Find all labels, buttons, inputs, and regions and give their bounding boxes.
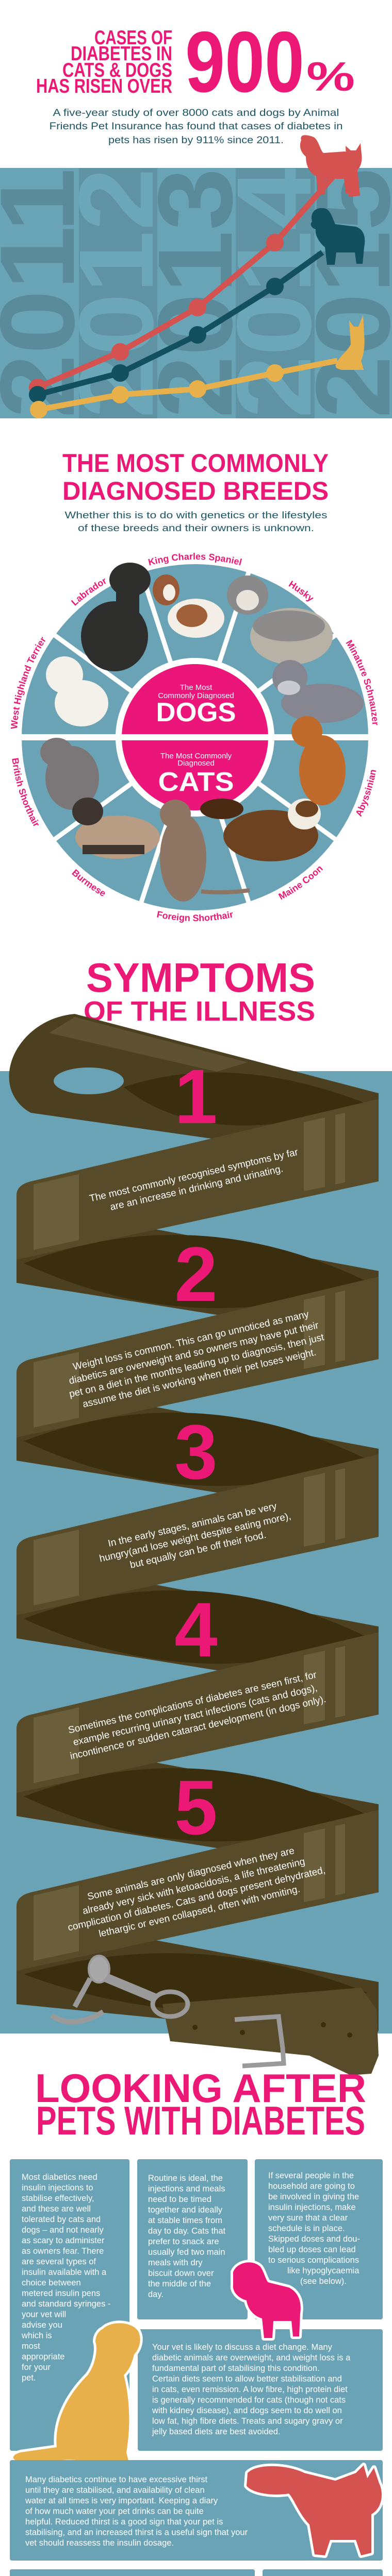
chart: growth of diabetes cases 2011-2016: 2014 [215, 168, 333, 418]
front band 4: symptom text: incontinence or sudden cataract development (in dogs only). [69, 1694, 327, 1762]
front band 3: symptom text: In the early stages, animals can be very [107, 1501, 278, 1549]
card: schedule: Skipped doses and dou- [268, 2234, 360, 2244]
breed labels: Husky [288, 581, 314, 602]
big number 900%: % [306, 54, 355, 99]
panel: symptoms leash [0, 1014, 392, 2075]
card: schedule: schedule is in place. [268, 2224, 345, 2233]
front band 3: symptom text: hungry(and lose weight despite eating more), [99, 1511, 292, 1564]
animal: maine coon [200, 799, 321, 861]
dogs centre label [156, 683, 236, 727]
breeds subtitle: of these breeds and their owners is unknown. [78, 523, 314, 533]
animal: foreign shorthair [160, 800, 250, 902]
line: all pets (red) [29, 177, 333, 396]
card: routine: Routine is ideal, the [148, 2174, 223, 2183]
card: routine: injections and meals [148, 2184, 225, 2194]
collar strap with buckle [162, 1988, 379, 2075]
card: routine: need to be timed [148, 2195, 211, 2204]
intro text: pets has risen by 911% since 2011. [108, 135, 284, 146]
card: insulin injections: Most diabetics need [22, 2173, 97, 2182]
back band with number 3 [17, 1388, 379, 1515]
breed labels: Minature Schnauzer [346, 640, 378, 725]
card: diet: Your vet is likely to discuss a diet change. Many [152, 2343, 333, 2352]
front band 4: symptom text: Sometimes the complications of diabetes are seen first, for [67, 1669, 318, 1736]
animal: british shorthair [40, 738, 99, 810]
front band 3: symptom text [17, 1454, 379, 1615]
heading: the most commonly diagnosed breeds: DIAGNOSED BREEDS [62, 477, 329, 505]
heading: symptoms of the illness: OF THE ILLNESS [84, 996, 315, 1027]
chart: growth of diabetes cases 2011-2016: 2013 [136, 168, 254, 418]
heading: looking after pets with diabetes: LOOKING AFTER [35, 2065, 366, 2111]
chart: growth of diabetes cases 2011-2016: 2012 [57, 168, 175, 418]
big number 900%: 900 [185, 13, 304, 110]
headline: cases of diabetes has risen over: HAS RISEN OVER [36, 75, 172, 97]
breed labels: West Highland Terrier [10, 637, 45, 729]
card: diet: with kidney disease), and dogs seem to do well on [152, 2406, 342, 2415]
card: schedule: be involved in giving the [268, 2192, 359, 2201]
back band with number 4: 4 [174, 1586, 218, 1673]
card: routine: usually fed two main [148, 2247, 225, 2257]
front band 5: symptom text: already very sick with ketoacidosis, a life threatening [81, 1856, 306, 1917]
card: insulin injections: pet. [22, 2373, 36, 2382]
card: insulin injections: choice between [22, 2278, 81, 2287]
card: insulin injections [10, 2159, 129, 2451]
card: schedule: If several people in the [268, 2171, 354, 2180]
back band with number 5 [17, 1743, 379, 1871]
animal: west highland terrier [46, 656, 108, 726]
breed labels: Labrador [71, 578, 106, 606]
card: insulin injections: for your [22, 2363, 51, 2372]
card: thirst: water at all times is very important. Keeping a diary [25, 2496, 218, 2505]
cats centre label: Diagnosed [177, 759, 215, 768]
line: dogs (teal) [29, 252, 322, 403]
heading: symptoms of the illness [84, 955, 315, 1027]
breed labels: Maine Coon [279, 867, 323, 900]
breed labels: British Shorthair [12, 758, 39, 826]
card: schedule: bled up doses can lead [268, 2245, 356, 2255]
card: routine: prefer to snack are [148, 2237, 219, 2246]
card: schedule: to serious complications [268, 2256, 359, 2265]
card: insulin injections: insulin injections to [22, 2183, 93, 2193]
card: insulin injections: tolerated by cats and [22, 2215, 101, 2224]
card: thirst: stabilising, and an increased thirst is a useful sign that your [25, 2528, 248, 2537]
front band 1: symptom text: are an increase in drinking and urinating. [109, 1163, 284, 1213]
front band 4: symptom text: example recurring urinary tract infections (cats and dogs), [72, 1683, 318, 1748]
front band 5: symptom text [17, 1810, 379, 1971]
front band 3: symptom text: but equally can be off their food. [129, 1530, 267, 1571]
front band 2: symptom text: pet on a diet in the months leading up to diagnosis, then just [68, 1332, 325, 1400]
animal: miniature schnauzer [272, 660, 364, 723]
card: diet: in cats, even remission. A low fibre, high protein diet [152, 2385, 348, 2394]
line: cats (yellow) [30, 361, 337, 418]
card: routine: at stable times from [148, 2216, 222, 2225]
intro text [50, 108, 342, 146]
heading: looking after pets with diabetes [35, 2065, 366, 2143]
card: diet: Certain diets seem to allow better stabilisation and [152, 2374, 342, 2383]
card: routine: biscuit down over [148, 2269, 214, 2278]
animal: burmese [72, 798, 160, 859]
front band 2: symptom text: diabetics are overweight and so owners may have put their [68, 1320, 320, 1386]
icon: red dog and cat silhouettes [300, 135, 362, 197]
dogs centre label: DOGS [156, 698, 236, 727]
front band 1: symptom text: The most commonly recognised symptoms by far [88, 1147, 300, 1204]
card: insulin injections: most [22, 2342, 40, 2351]
card: insulin injections: as owners fear. There [22, 2246, 104, 2256]
card: schedule: household are going to [268, 2181, 355, 2191]
icon: pink dog silhouette [233, 2262, 301, 2338]
front band 1: symptom text [17, 1099, 379, 1260]
intro text: Friends Pet Insurance has found that cases of diabetes in [50, 121, 342, 132]
front band 2: symptom text: assume the diet is working when their pet loses weight. [81, 1347, 317, 1410]
headline: cases of diabetes has risen over: CASES OF [94, 27, 172, 49]
card: routine: day. [148, 2290, 164, 2299]
card: thirst: Many diabetics continue to have excessive thirst [25, 2475, 208, 2484]
card: insulin injections: and standard syringes - [22, 2299, 110, 2309]
card: schedule: like hypoglycaemia [287, 2266, 360, 2275]
animal: abyssinian [291, 716, 346, 805]
heading: symptoms of the illness: SYMPTOMS [86, 955, 315, 1001]
card: insulin injections: are several types of [22, 2257, 96, 2266]
card: insulin injections: and these are well [22, 2204, 91, 2213]
card: schedule: (see below). [300, 2277, 347, 2286]
animal: husky [227, 575, 333, 665]
card: diet: low fat, high fibre diets. Treats and sugary gravy or [152, 2416, 343, 2426]
headline: cases of diabetes has risen over: DIABETES IN [71, 43, 172, 65]
breed labels [10, 552, 378, 923]
card: diet: is generally recommended for cats (though not cats [152, 2396, 346, 2405]
front band 5: symptom text: complication of diabetes. Cats and dogs present dehydrated, [67, 1865, 326, 1934]
card: routine: the middle of the [148, 2279, 211, 2289]
card: insulin injections: advise you [22, 2320, 62, 2330]
card: exercise [263, 2569, 383, 2576]
front band 5: symptom text: lethargic or even collapsed, often with vomiting. [98, 1884, 301, 1940]
card: insulin injections: as scary to administer [22, 2236, 105, 2245]
dogs centre label: The Most [180, 683, 213, 692]
card: routine: together and ideally [148, 2205, 223, 2214]
icon: red cat silhouette [247, 2465, 382, 2555]
heading: the most commonly diagnosed breeds [62, 449, 329, 505]
back band with number 2 [17, 1210, 379, 1337]
card: diet: jelly based diets are best avoided. [152, 2427, 281, 2436]
card: routine [137, 2159, 248, 2319]
breed labels: Foreign Shorthair [157, 911, 233, 923]
card: insulin injections: your vet will [22, 2310, 66, 2319]
headline: cases of diabetes has risen over [36, 27, 172, 97]
card: insulin injections: insulin available with a [22, 2268, 107, 2277]
clasp [52, 1956, 188, 2022]
front band 5: symptom text: Some animals are only diagnosed when they are [86, 1845, 296, 1903]
back band with number 2: 2 [174, 1231, 218, 1317]
card: insulin injections: metered insulin pens [22, 2289, 100, 2298]
breeds subtitle [65, 510, 327, 533]
icon: yellow dog silhouette [13, 2323, 140, 2464]
card: insulin injections: appropriate [22, 2352, 64, 2362]
breed labels: King Charles Spaniel [148, 552, 242, 566]
leash handle with number 1: 1 [174, 1053, 218, 1140]
card: diet: fundamental part of stabilising this condition. [152, 2364, 320, 2373]
icon: teal dog silhouette [311, 208, 365, 265]
card: schedule [255, 2159, 383, 2319]
headline: cases of diabetes has risen over: CATS & DOGS [62, 59, 172, 81]
front band 4: symptom text [17, 1632, 379, 1793]
leash handle with number 1 [9, 1014, 379, 1160]
card: routine: day to day. Cats that [148, 2227, 226, 2236]
chart: growth of diabetes cases 2011-2016 [0, 135, 392, 418]
intro text: A five-year study of over 8000 cats and dogs by Animal [53, 108, 339, 118]
cats centre label [158, 752, 234, 797]
leash end loop [17, 1921, 379, 2038]
dogs centre label: Commonly Diagnosed [158, 691, 234, 700]
card: other conditions [10, 2569, 255, 2576]
front band 2: symptom text [17, 1277, 379, 1437]
animal: king charles spaniel [153, 574, 224, 638]
back band with number 4 [17, 1566, 379, 1693]
card: thirst: until they are stabilised, and availability of clean [25, 2485, 205, 2495]
back band with number 5: 5 [174, 1764, 218, 1851]
card: thirst [10, 2460, 383, 2561]
cats centre label: The Most Commonly [160, 752, 232, 760]
icon: yellow cat silhouette [335, 315, 365, 370]
cats centre label: CATS [158, 767, 234, 797]
card: diet: diabetic animals are overweight, and weight loss is a [152, 2353, 351, 2363]
breed wheel [10, 552, 378, 923]
breed labels: Burmese [72, 869, 105, 896]
heading: the most commonly diagnosed breeds: THE MOST COMMONLY [62, 449, 329, 478]
card: insulin injections: dogs – and not nearly [22, 2226, 104, 2235]
card: insulin injections: which is [21, 2331, 52, 2340]
front band 2: symptom text: Weight loss is common. This can go unnoticed as many [72, 1309, 310, 1372]
card: thirst: of how much water your pet drinks can be quite [25, 2507, 204, 2516]
breeds subtitle: Whether this is to do with genetics or the lifestyles [65, 510, 327, 520]
card: thirst: helpful. Reduced thirst is a good sign that your pet is [25, 2517, 223, 2527]
animal: labrador [81, 563, 151, 671]
card: schedule: insulin injections, make [268, 2203, 356, 2212]
card: schedule: very sure that a clear [268, 2213, 348, 2223]
breed labels: Abyssinian [356, 770, 376, 817]
card: diet [138, 2329, 383, 2451]
card: thirst: vet should reassess the insulin dosage. [25, 2538, 174, 2548]
back band with number 3: 3 [174, 1409, 218, 1495]
card: routine: meals with dry [148, 2258, 203, 2267]
card: insulin injections: stabilise effectively, [22, 2194, 94, 2203]
